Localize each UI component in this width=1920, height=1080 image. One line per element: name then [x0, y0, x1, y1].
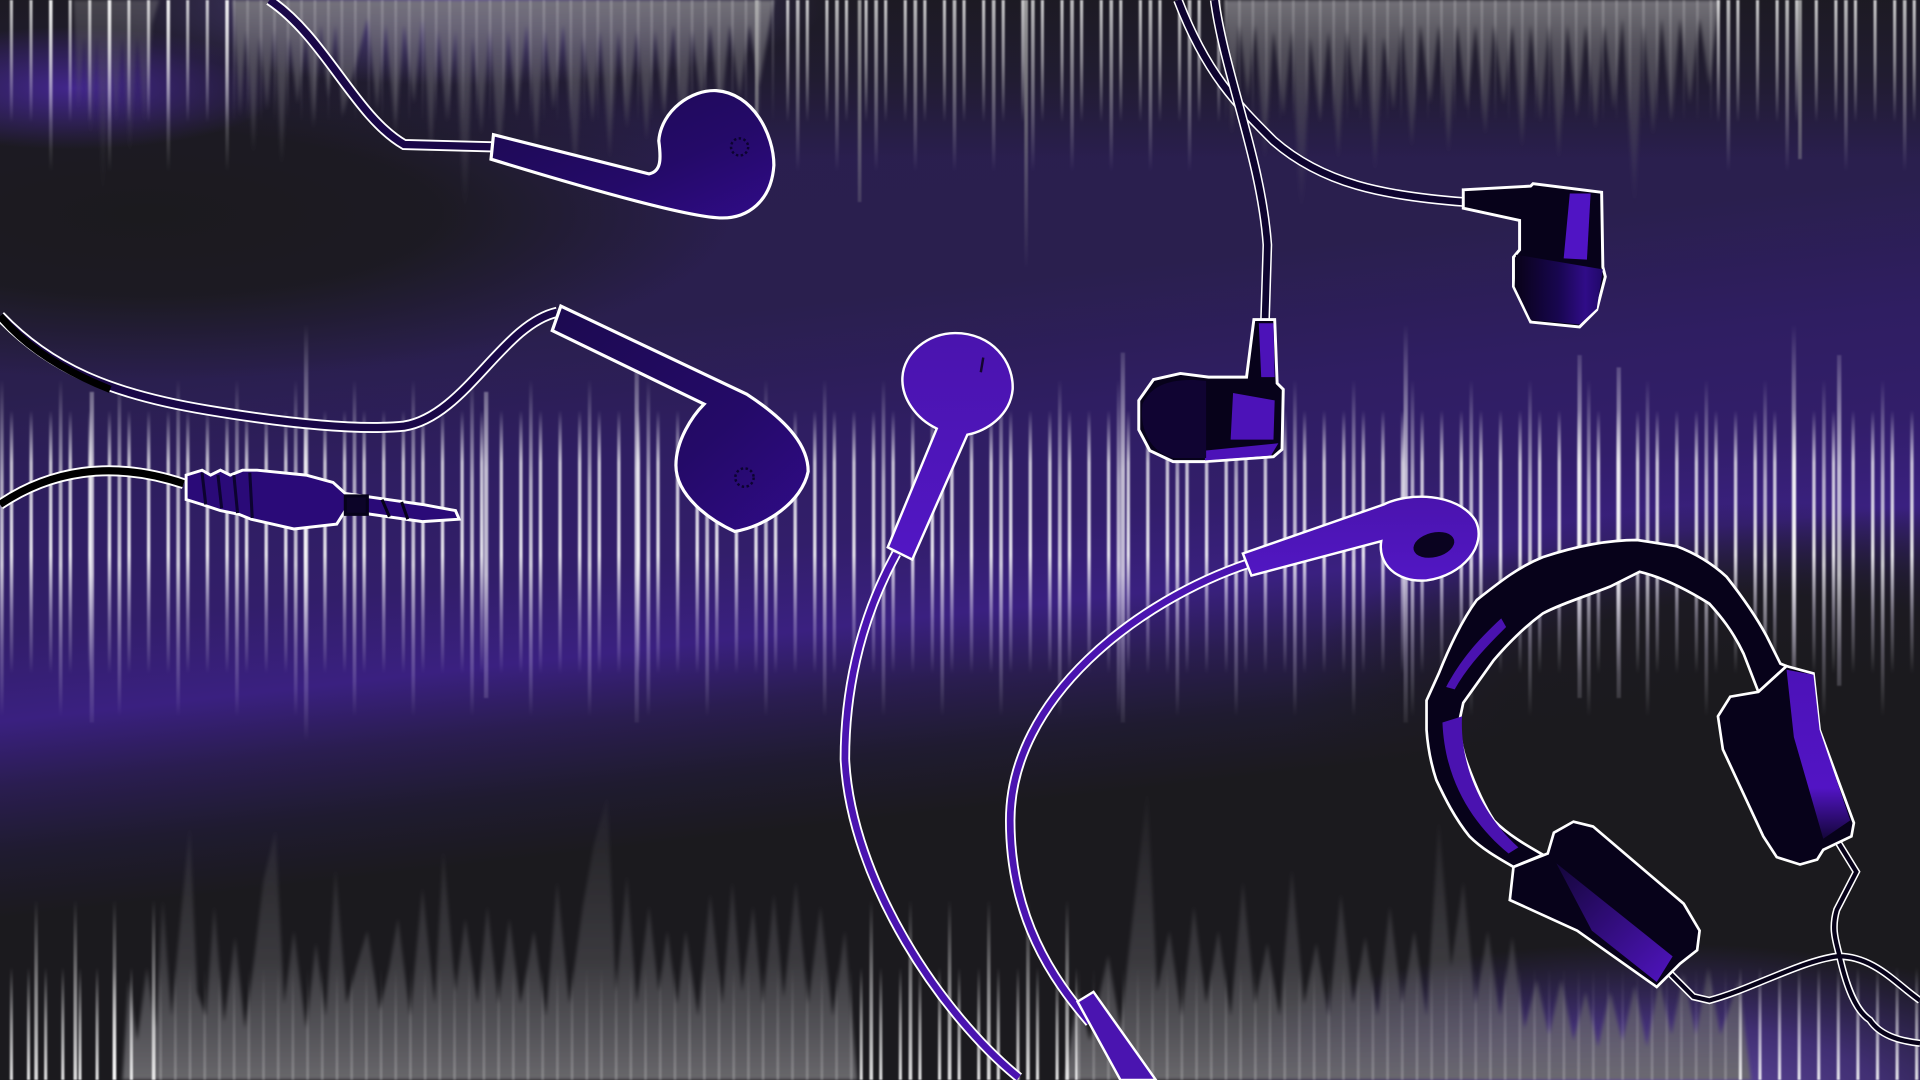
- earbud: lower centre: [1010, 497, 1479, 1080]
- left ear cup: [1510, 822, 1700, 987]
- earbud: top left: [269, 0, 774, 218]
- over-ear headphones: [1427, 540, 1920, 1043]
- sound wave: top band: [0, 0, 1920, 267]
- headphone cables: [1670, 840, 1920, 1043]
- audio jack plug: [0, 470, 459, 529]
- in-ear earphone: upper centre: [1139, 0, 1283, 462]
- earbud: middle left: [0, 306, 808, 531]
- in-ear earphone: top right: [1178, 0, 1605, 327]
- headband: [1427, 540, 1787, 867]
- sound wave: bottom band: [0, 790, 1920, 1080]
- earbud: centre: [845, 333, 1019, 1078]
- sound wave: middle band: [0, 324, 1920, 741]
- right ear cup: [1718, 666, 1854, 864]
- headband highlights: [1442, 618, 1518, 853]
